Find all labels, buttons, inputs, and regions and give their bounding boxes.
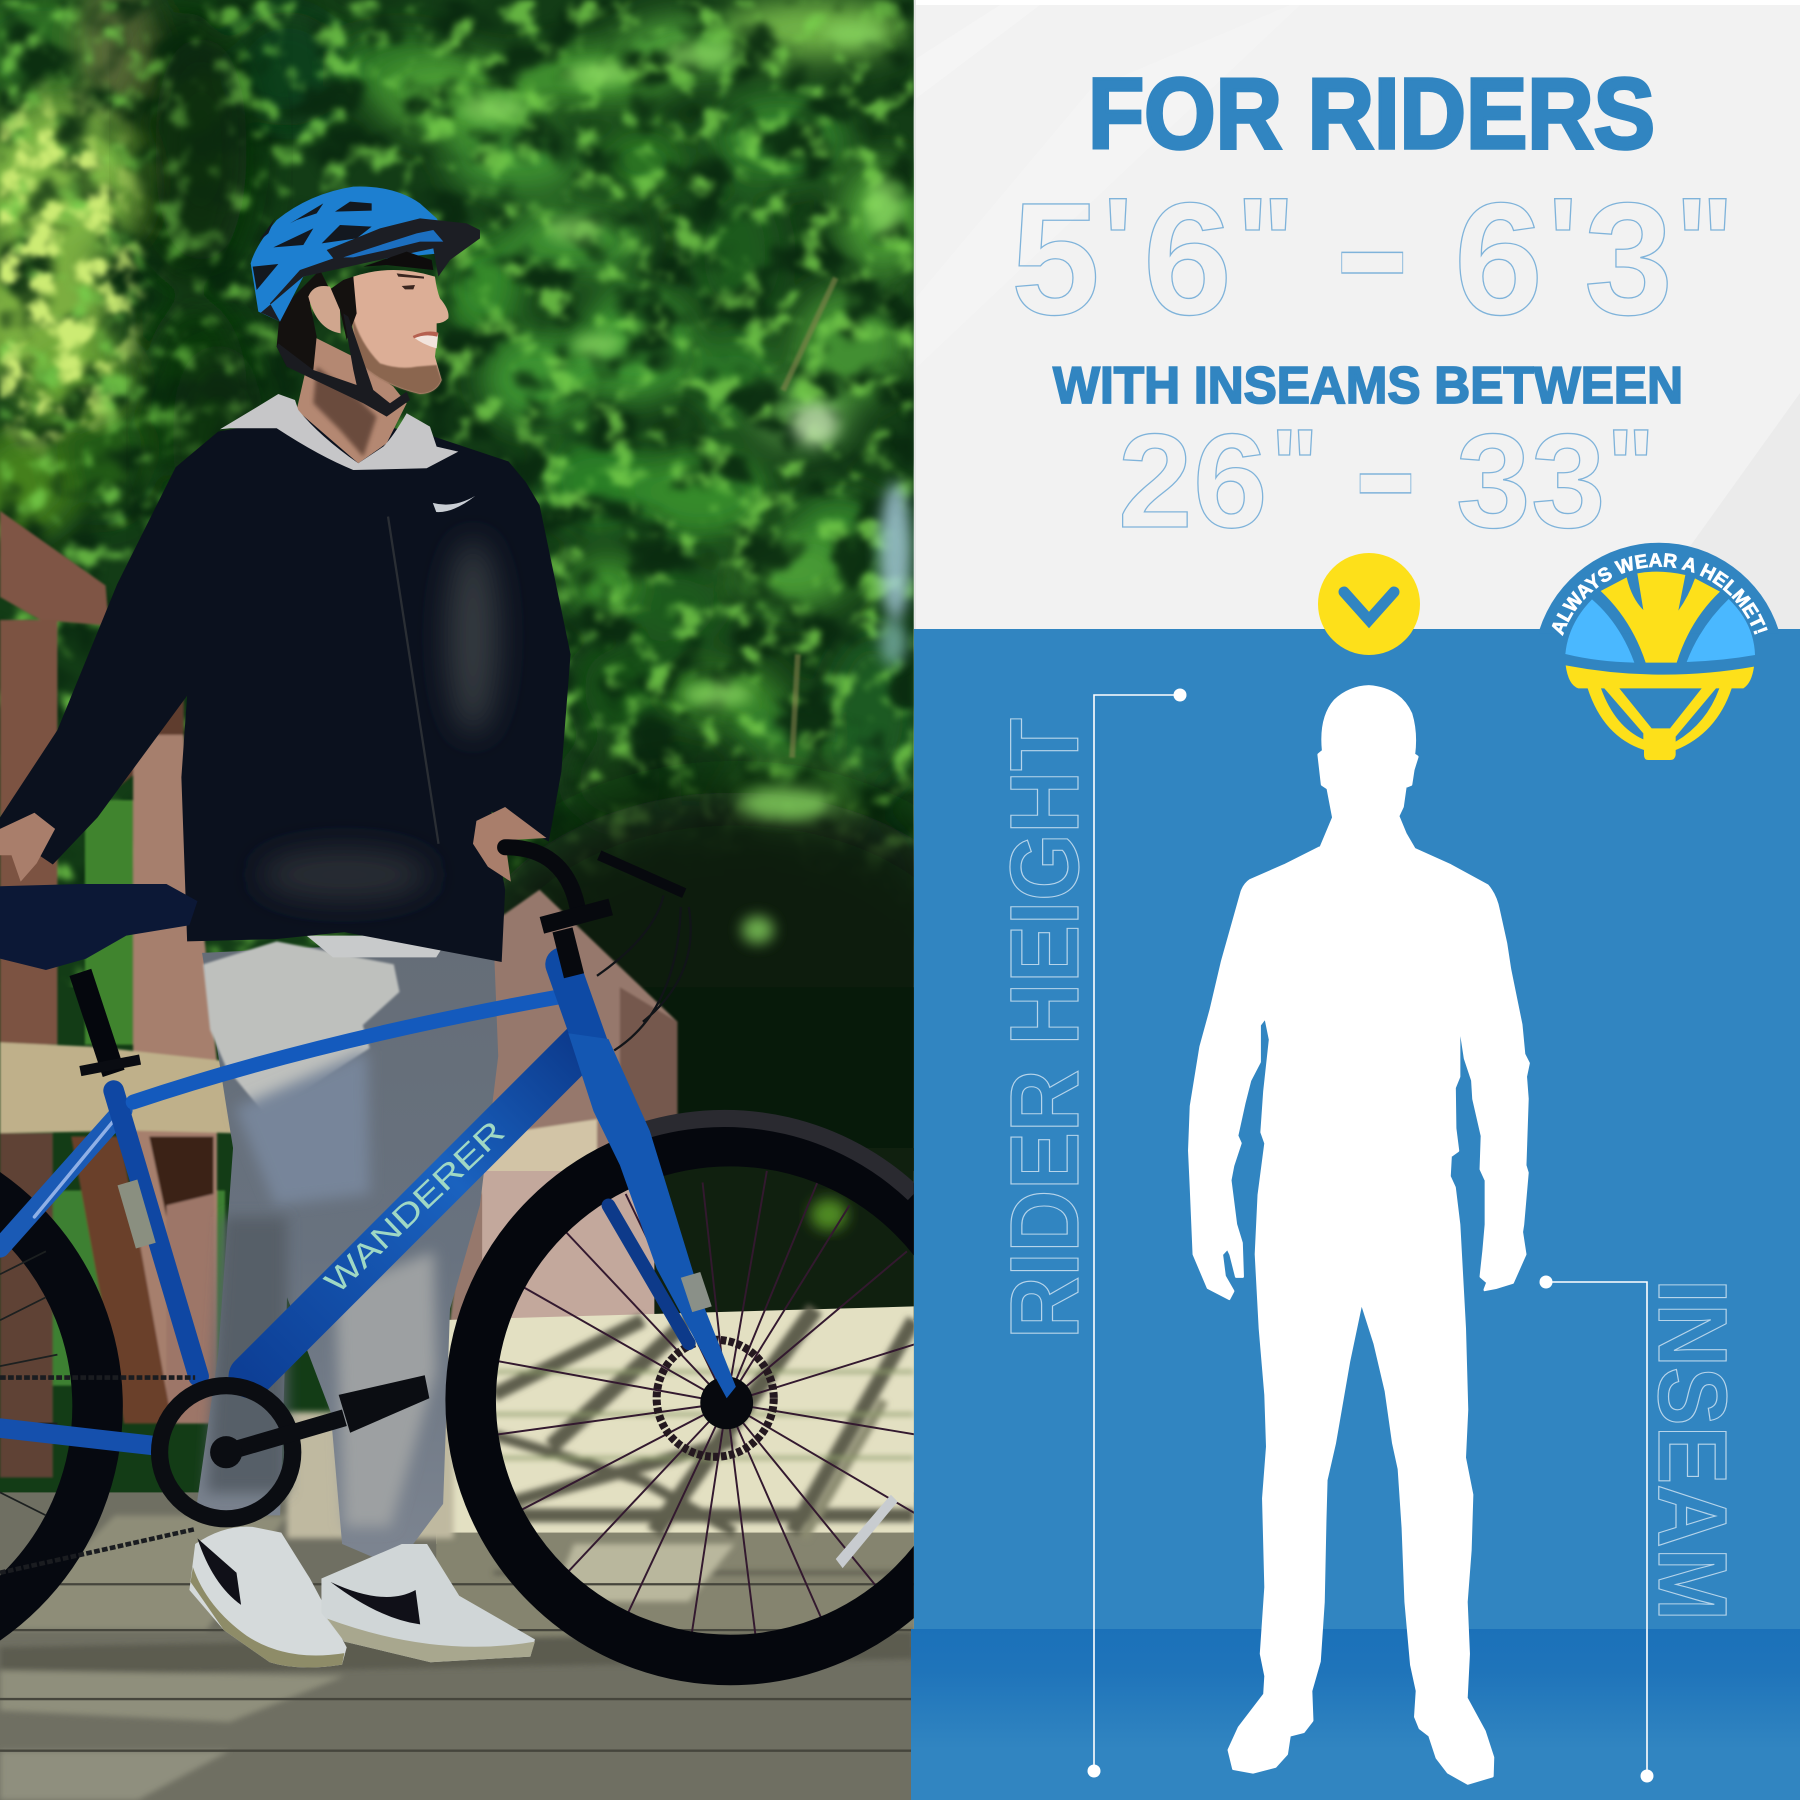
inseam range: – (1357, 364, 1414, 576)
foliage texture (0, 0, 914, 1171)
handlebar and cables (505, 847, 691, 1050)
title: FOR RIDERS (1088, 58, 1655, 170)
inseam label: INSEAM (1638, 1279, 1747, 1621)
drivetrain (0, 1375, 429, 1573)
panel: cyclist photo (0, 0, 1010, 1800)
rider pants (195, 936, 498, 1567)
tree branches (783, 278, 836, 758)
rider height range: 5663 (1011, 169, 1673, 348)
chin strap (277, 313, 410, 417)
icon: always wear a helmet badge: ALWAYS WEAR A HELMET! (1552, 553, 1768, 636)
inseam range (1118, 364, 1654, 576)
icon: yellow chevron circle (1318, 553, 1420, 655)
bridge deck (0, 1148, 918, 1800)
rider height range: '"'" (1103, 173, 1734, 312)
foliage background (0, 0, 930, 953)
panel: blue sizing area (911, 629, 1800, 1800)
WANDERER frame text: WANDERER (318, 1113, 511, 1300)
inseam measure line (1540, 1276, 1654, 1782)
human silhouette (1189, 687, 1529, 1783)
inseam heading: WITH INSEAMS BETWEEN (1053, 357, 1683, 415)
hair (277, 270, 357, 370)
panel: light header background (914, 0, 1800, 630)
saddle and seat post (0, 884, 197, 1073)
icon: always wear a helmet badge (1540, 542, 1778, 760)
rider height label: RIDER HEIGHT (990, 718, 1099, 1339)
rider hands (0, 807, 546, 882)
face (352, 270, 449, 394)
bridge railing (0, 511, 677, 1477)
rider head and helmet (220, 187, 480, 470)
rear wheel (0, 1147, 98, 1666)
front wheel (471, 1118, 990, 1660)
bicycle frame (0, 964, 736, 1445)
rider shoes (189, 1527, 535, 1668)
rider height measure line (1088, 688, 1186, 1778)
rider jacket (0, 413, 571, 962)
neck (297, 337, 407, 463)
rider height range: – (1338, 131, 1407, 364)
inseam range: "" (1271, 409, 1654, 521)
helmet shell (251, 187, 450, 322)
hood (220, 394, 458, 470)
inseam range: 2633 (1118, 407, 1606, 556)
foliage highlights (461, 23, 912, 944)
